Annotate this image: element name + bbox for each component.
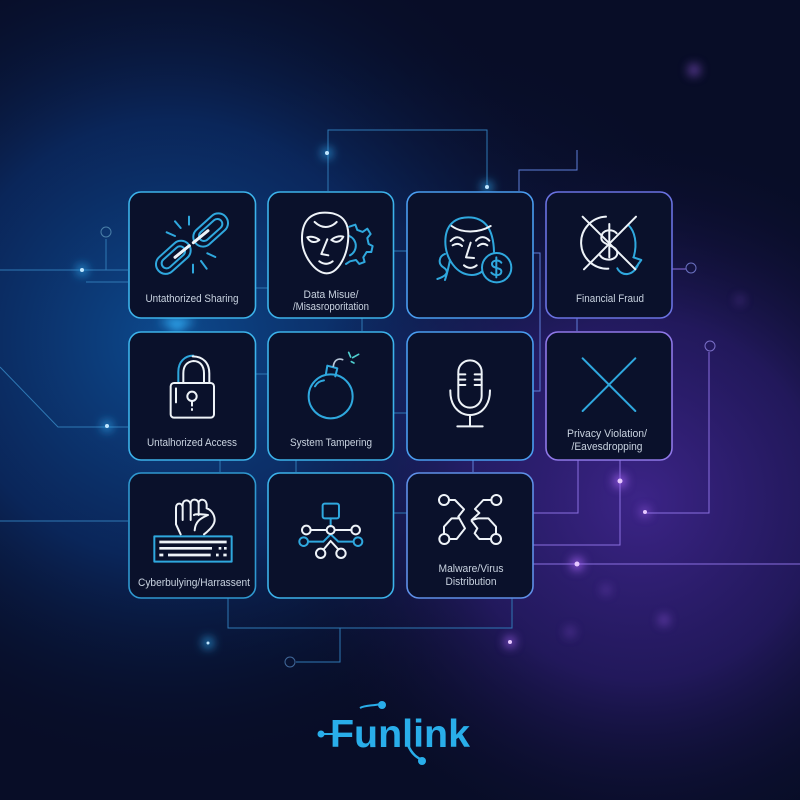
- label: Untathorized Sharing: [146, 293, 238, 305]
- card: Identity Fraud: [407, 192, 533, 318]
- card: Data Misuse: [268, 192, 394, 318]
- label: Financial Fraud: [576, 293, 644, 305]
- card: Microphone: [407, 332, 533, 460]
- icon: broken chain: [152, 209, 232, 278]
- label: [438, 563, 504, 588]
- label: Untalhorized Access: [147, 437, 237, 449]
- card: System Tampering: [268, 332, 394, 460]
- icon: malware circuit: [439, 495, 501, 544]
- label: /Misasroporitation: [293, 301, 369, 313]
- icon: fist on keyboard: [154, 500, 232, 562]
- icon: face and dollar coin: [437, 217, 511, 282]
- card: Financial Fraud: [546, 192, 672, 318]
- card: Malware: [407, 473, 533, 598]
- icon: bomb: [309, 352, 359, 418]
- label: Malware/Virus: [438, 563, 504, 575]
- open circuit nodes: [101, 227, 715, 667]
- icon: padlock: [171, 356, 214, 418]
- icon: network nodes: [299, 504, 362, 558]
- logo: Funlink: Funlink: [330, 713, 470, 756]
- label: Distribution: [446, 576, 496, 588]
- icon: crossed dollar circle: [581, 217, 641, 274]
- label: [567, 428, 648, 453]
- label: Data Misue/: [304, 289, 359, 301]
- label: System Tampering: [290, 437, 372, 449]
- label: /Eavesdropping: [572, 441, 642, 453]
- glowing dots: [77, 64, 744, 648]
- logo: Funlink: [318, 701, 470, 765]
- icon: microphone: [450, 360, 490, 426]
- card: Privacy Violation: [546, 332, 672, 460]
- label: [293, 289, 369, 313]
- card: Unauthorized Sharing: [129, 192, 256, 318]
- label: Privacy Violation/: [567, 428, 648, 440]
- card: Cyberbullying: [129, 473, 256, 598]
- circuit lines: [0, 130, 800, 662]
- label: Cyberbulying/Harrassent: [138, 577, 250, 589]
- icon: mask and gear: [302, 213, 373, 273]
- card: Network: [268, 473, 394, 598]
- card: Unauthorized Access: [129, 332, 256, 460]
- icon: cross: [583, 358, 635, 411]
